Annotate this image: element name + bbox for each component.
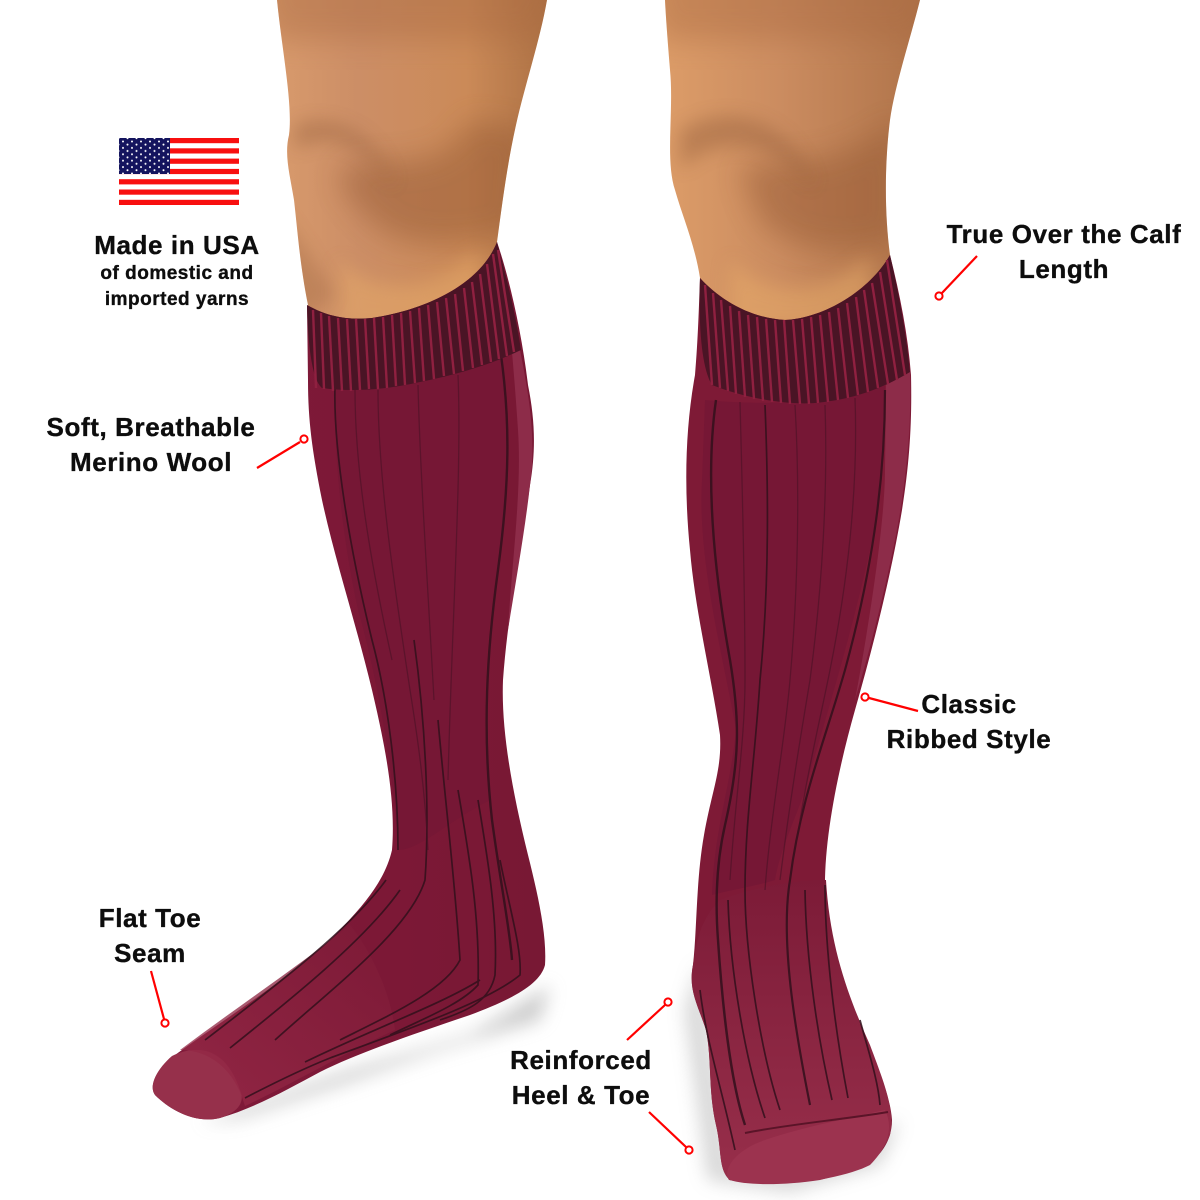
right foot — [692, 880, 891, 1184]
callout: calf length — [935, 219, 1181, 300]
right knee skin — [665, 0, 920, 330]
callout: merino wool — [47, 412, 308, 477]
right toe — [727, 1110, 889, 1184]
right faint ribs — [730, 398, 856, 890]
callout: reinforced heel and toe — [510, 998, 693, 1154]
callout: ribbed style: Ribbed Style — [887, 724, 1051, 754]
callout: ribbed style — [861, 689, 1051, 754]
left toe — [153, 1050, 242, 1119]
left faint ribs — [355, 375, 459, 850]
callout: calf length: True Over the Calf — [947, 219, 1181, 249]
callout: merino wool: Merino Wool — [70, 447, 232, 477]
right cuff — [700, 255, 910, 404]
foot shadows — [200, 960, 900, 1192]
heading: made in usa — [94, 230, 260, 310]
icon: american flag — [119, 138, 239, 205]
left ribs — [205, 355, 520, 1098]
callout: merino wool: Soft, Breathable — [47, 412, 255, 442]
subtext: yarns: of domestic and — [100, 263, 254, 284]
callout: reinforced heel and toe: Reinforced — [510, 1045, 652, 1075]
callout: calf length: Length — [1019, 254, 1109, 284]
left foot highlight — [180, 925, 395, 1106]
subtext: yarns — [100, 263, 254, 310]
left cuff — [307, 242, 521, 391]
left panel darker — [335, 355, 508, 850]
left knee skin — [277, 0, 547, 330]
left knee shading — [277, 0, 547, 318]
callout: reinforced heel and toe: Heel & Toe — [512, 1080, 650, 1110]
subtext: yarns: imported yarns — [105, 289, 249, 310]
callout: flat toe seam: Seam — [114, 938, 186, 968]
callout: flat toe seam: Flat Toe — [99, 903, 201, 933]
right sock — [686, 255, 911, 1183]
right side panel — [855, 372, 910, 700]
left sock — [153, 242, 545, 1119]
right panel darker — [701, 385, 885, 895]
right leg — [665, 0, 920, 1184]
right ribs — [700, 390, 885, 1150]
right knee shading — [665, 0, 920, 320]
callout: flat toe seam — [99, 903, 201, 1027]
heading: made in usa: Made in USA — [94, 230, 260, 260]
left sock edge highlight — [508, 350, 532, 630]
callout: ribbed style: Classic — [921, 689, 1017, 719]
left leg — [153, 0, 570, 1119]
